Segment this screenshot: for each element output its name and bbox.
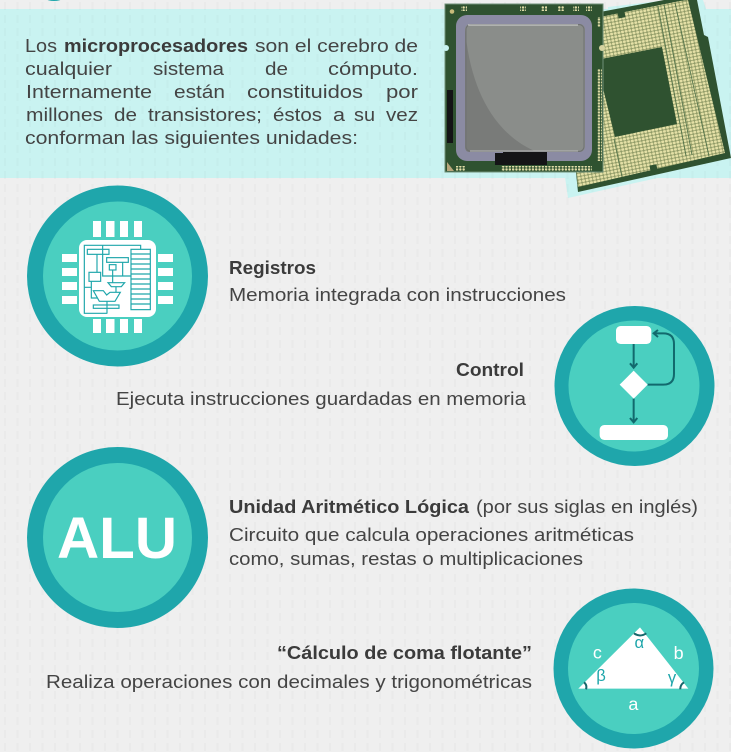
- panel: ALU icon: ALU: [57, 506, 177, 571]
- intro text: Internamente: [26, 81, 152, 102]
- ALU text: como, sumas, restas o multiplicaciones: [229, 548, 583, 569]
- intro text: conforman las siguientes unidades:: [25, 127, 358, 148]
- ALU text: (por sus siglas en inglés): [476, 496, 698, 517]
- panel: floating point icon: α: [635, 633, 645, 652]
- control text: [116, 359, 527, 409]
- intro text: constituidos: [247, 81, 363, 102]
- registros text: [229, 257, 566, 305]
- circle peek at top edge: [40, 0, 68, 1]
- registros text: Memoria integrada con instrucciones: [229, 284, 566, 305]
- intro text: transistores;: [148, 104, 262, 125]
- intro text: de: [114, 104, 137, 125]
- panel: floating point icon: γ: [668, 668, 677, 687]
- intro text: vez: [386, 104, 418, 125]
- control text: Ejecuta instrucciones guardadas en memoria: [116, 388, 527, 409]
- control text: Control: [456, 359, 524, 380]
- floating point text: “Cálculo de coma flotante”: [277, 642, 532, 663]
- intro text: cualquier: [25, 58, 112, 79]
- panel: control icon: [554, 306, 714, 466]
- intro text: [25, 35, 418, 148]
- microprocessor illustration: [443, 0, 731, 192]
- panel: floating point icon: β: [596, 666, 606, 685]
- panel: floating point icon: c: [593, 642, 602, 662]
- intro text: de: [265, 58, 288, 79]
- intro text: cómputo.: [328, 58, 418, 79]
- intro text: son el cerebro de: [255, 35, 418, 56]
- registros text: Registros: [229, 257, 316, 278]
- intro text: millones: [26, 104, 103, 125]
- intro text: Los: [25, 35, 57, 56]
- back of chip: [560, 0, 731, 192]
- intro text: a: [333, 104, 346, 125]
- intro text: su: [354, 104, 375, 125]
- panel: registros icon: [27, 186, 208, 366]
- intro text: microprocesadores: [64, 35, 248, 56]
- intro panel: [0, 0, 731, 198]
- panel: ALU icon: [27, 447, 208, 628]
- ALU text: [229, 496, 698, 569]
- intro text: éstos: [273, 104, 322, 125]
- intro text: están: [174, 81, 225, 102]
- intro text: sistema: [153, 58, 225, 79]
- floating point text: Realiza operaciones con decimales y trigonométricas: [46, 671, 532, 692]
- ALU text: Unidad Aritmético Lógica: [229, 496, 470, 517]
- panel: floating point icon: [554, 588, 714, 748]
- ALU text: Circuito que calcula operaciones aritméticas: [229, 524, 634, 545]
- intro text: por: [386, 81, 418, 102]
- panel: floating point icon: a: [628, 694, 638, 714]
- front of chip: [443, 4, 605, 172]
- floating point text: [46, 642, 532, 692]
- panel: floating point icon: b: [674, 643, 684, 663]
